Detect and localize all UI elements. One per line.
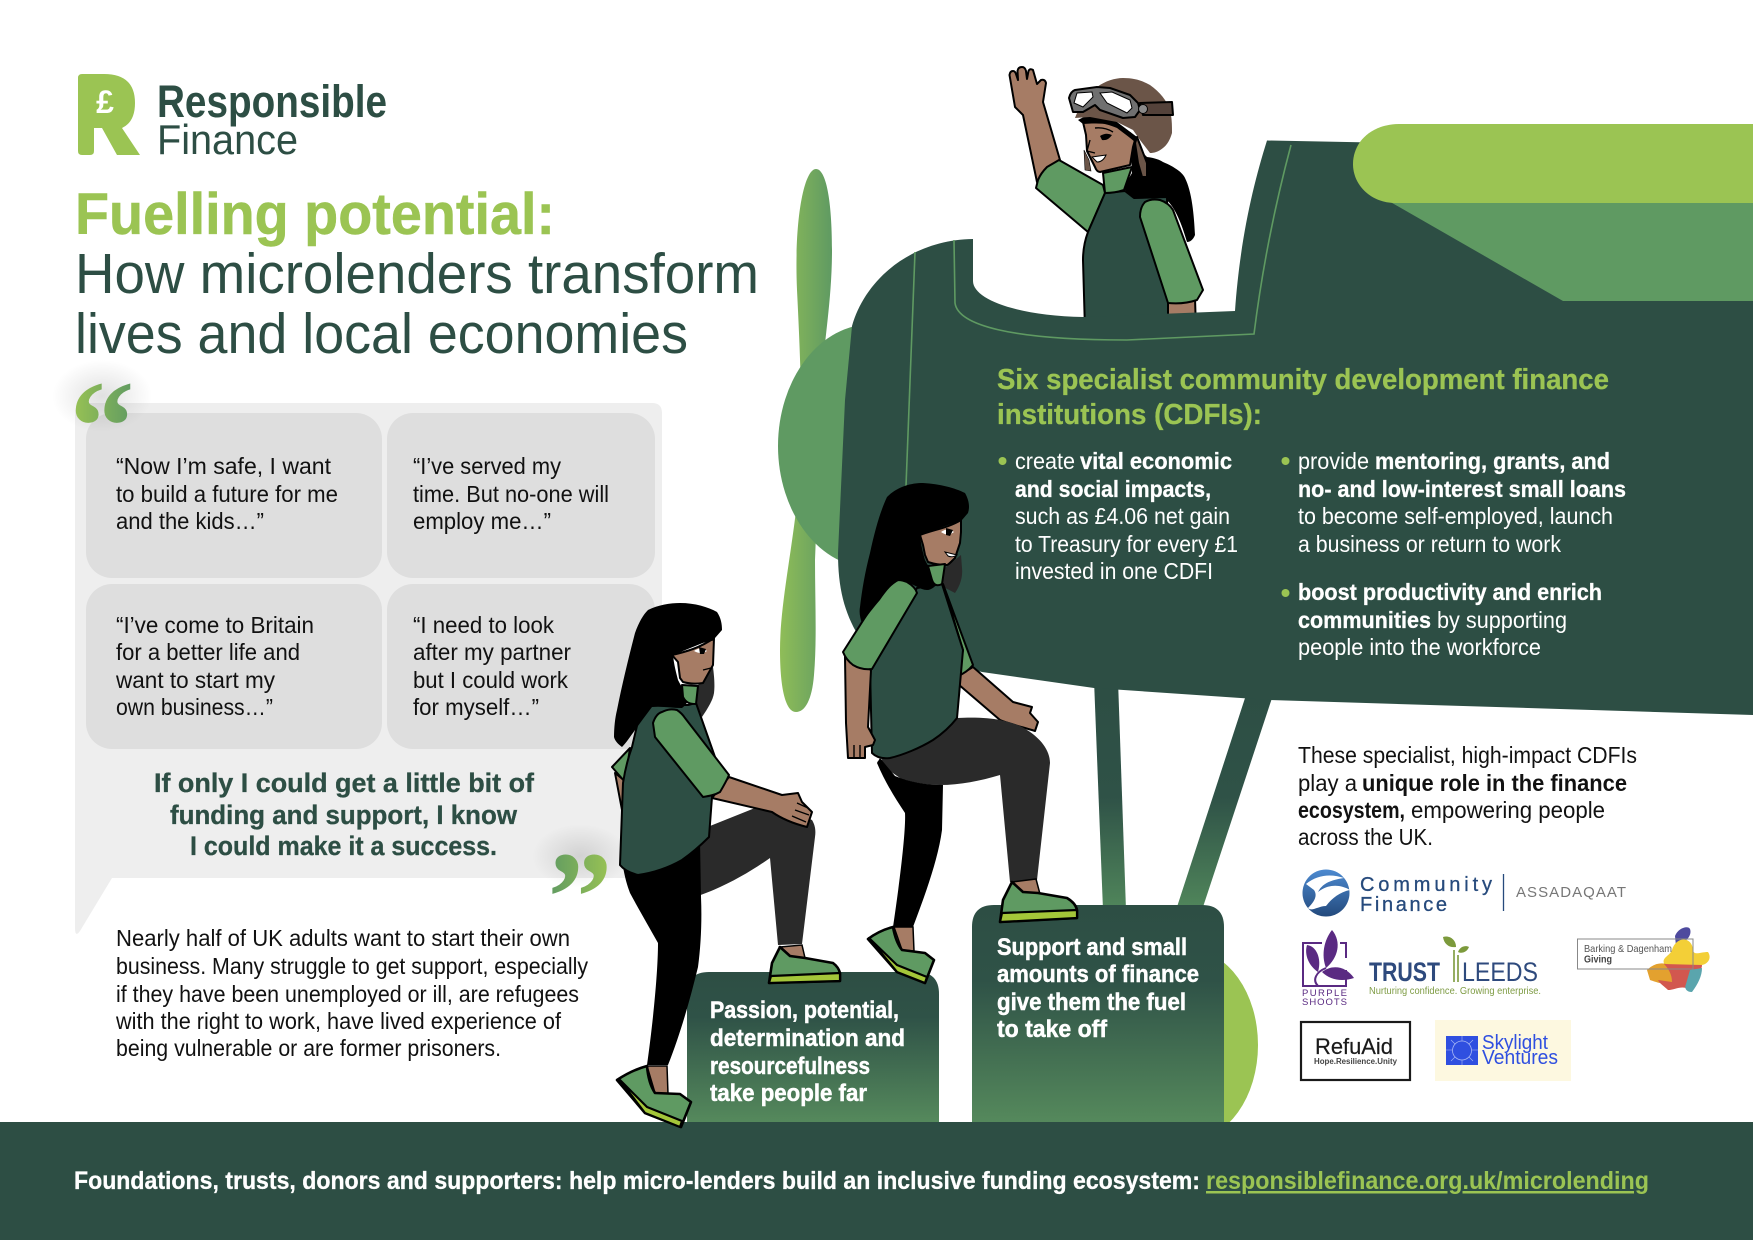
- quote card 3: for a better life and: [116, 639, 300, 665]
- text block: context paragraph: with the right to work, have lived experience of: [115, 1008, 562, 1034]
- text block: context paragraph: [115, 925, 588, 1061]
- step block 1: take people far: [710, 1080, 867, 1107]
- strut 2: [1176, 695, 1273, 910]
- callout: funding wish: funding and support, I know: [170, 800, 518, 830]
- text block: unique role: [1298, 742, 1637, 850]
- bullet: vital economic impacts: invested in one CDFI: [1015, 558, 1213, 584]
- bullet: vital economic impacts: such as £4.06 net gain: [1015, 503, 1230, 529]
- hair: [614, 603, 722, 747]
- logo: Responsible Finance: [78, 74, 387, 163]
- logo: RefuAid: [1301, 1022, 1410, 1080]
- goggles: [1069, 87, 1173, 118]
- face: [920, 520, 961, 565]
- footer banner: [0, 1122, 1753, 1240]
- quote card 3: own business…”: [116, 694, 273, 720]
- arm over knee: [712, 777, 812, 827]
- quote card 4: but I could work: [413, 667, 568, 693]
- text block: context paragraph: Nearly half of UK adults want to start their own: [116, 925, 570, 951]
- logo wordmark: Responsible: [157, 76, 387, 127]
- logo: Barking and Dagenham Giving: Giving: [1584, 954, 1612, 966]
- bullet: mentoring, grants and loans: [1282, 448, 1626, 557]
- logo: RefuAid: Hope.Resilience.Unity: [1314, 1057, 1398, 1066]
- quote card 1: “Now I’m safe, I want: [116, 453, 332, 479]
- raised ankle: [1012, 879, 1040, 894]
- quote card 4: “I need to look: [413, 612, 554, 638]
- logo: Community Finance Assadaqaat: [1302, 870, 1626, 916]
- standing leg: [622, 840, 701, 1065]
- logo: Skylight Ventures: Ventures: [1482, 1047, 1558, 1069]
- logo: Purple Shoots: SHOOTS: [1302, 997, 1347, 1008]
- text block: unique role: across the UK.: [1298, 824, 1433, 850]
- hairline: [1078, 115, 1137, 142]
- torso vest: [620, 703, 715, 875]
- icon: sun square: [1446, 1036, 1478, 1065]
- heading: six specialist CDFIs: [997, 364, 1609, 431]
- bullet: mentoring, grants and loans: a business or return to work: [1298, 531, 1561, 557]
- raised shoe: [1000, 882, 1077, 922]
- raised thigh and lower leg: [695, 808, 815, 945]
- raised arm and hand: [1010, 67, 1060, 182]
- wing: upper lime: [1353, 124, 1753, 203]
- turtleneck: [1103, 167, 1132, 193]
- icon: R with pound sign: £: [96, 84, 114, 120]
- nose cone: [778, 324, 966, 568]
- step block 2: give them the fuel: [997, 989, 1186, 1016]
- pilot back hair: [1123, 140, 1195, 242]
- icon: R with pound sign: [78, 74, 140, 155]
- logo: Trust Leeds: [1369, 937, 1541, 997]
- turtleneck: [928, 564, 945, 585]
- helmet: [1075, 78, 1172, 153]
- title: Fuelling potential:: [75, 182, 555, 247]
- text block: unique role: These specialist, high-impact CDFIs: [1298, 742, 1637, 768]
- bullet: boost productivity: people into the workforce: [1298, 634, 1541, 660]
- pilot facial features: [1087, 128, 1113, 162]
- step block 2: amounts of finance: [997, 961, 1199, 988]
- far arm: [615, 773, 625, 810]
- icon: closing quote mark: [532, 824, 628, 970]
- hair: [860, 483, 969, 623]
- logo: Community Finance Assadaqaat: Finance: [1360, 894, 1447, 916]
- quote card 3: “I’ve come to Britain: [116, 612, 314, 638]
- near sleeve: [843, 580, 917, 669]
- near sleeve: [653, 709, 729, 797]
- logo: Purple Shoots: [1302, 930, 1354, 1008]
- bullet: vital economic impacts: and social impacts,: [1015, 476, 1211, 502]
- bullet: vital economic impacts: [998, 448, 1238, 584]
- title: [75, 182, 759, 366]
- quote card 2: employ me…”: [413, 508, 551, 534]
- logo: Barking and Dagenham Giving: Barking & Dagenham: [1584, 943, 1672, 955]
- logo: Trust Leeds: TRUST: [1369, 957, 1440, 987]
- logo: Community Finance Assadaqaat: Community: [1360, 874, 1492, 896]
- step block 2: [972, 905, 1224, 1124]
- bullet: mentoring, grants and loans: mentoring, grants, and: [1375, 448, 1610, 474]
- icon: closing quote mark: ”: [548, 826, 612, 970]
- illustration: aeroplane: [778, 124, 1753, 1140]
- text block: context paragraph: being vulnerable or are former prisoners.: [116, 1035, 501, 1061]
- bullet: vital economic impacts: to Treasury for every £1: [1015, 531, 1238, 557]
- pilot face: [1083, 122, 1135, 172]
- bullet list: column 1: [998, 448, 1238, 584]
- footer banner: responsiblefinance.org.uk/microlending: [1206, 1167, 1649, 1195]
- step block 1: resourcefulness: [710, 1053, 870, 1080]
- propeller: [780, 169, 832, 712]
- bullet: boost productivity: boost productivity and enrich: [1298, 579, 1602, 605]
- bullet: vital economic impacts: create: [1015, 448, 1075, 474]
- quote card 1: and the kids…”: [116, 508, 264, 534]
- back hair shadow: [690, 667, 714, 717]
- bullet: boost productivity: by supporting: [1437, 607, 1567, 633]
- icon: opening quote mark: “: [70, 355, 134, 499]
- bullet list: column 2: [1282, 448, 1626, 660]
- standing leg: [877, 758, 943, 927]
- text block: unique role: empowering people: [1411, 797, 1605, 823]
- icon: globe: [1302, 870, 1350, 916]
- text block: unique role: ecosystem,: [1298, 797, 1405, 823]
- quote card 4: for myself…”: [413, 694, 539, 720]
- wing: lower mid-green: [1387, 200, 1753, 301]
- quote card 2: [387, 413, 655, 578]
- bullet: mentoring, grants and loans: no- and low-interest small loans: [1298, 476, 1626, 502]
- speech bubble background: [75, 403, 662, 934]
- footer banner: Foundations, trusts, donors and supporters: help micro-lenders build an inclusive funding ecosystem:: [74, 1167, 1200, 1195]
- wheel: [1122, 950, 1258, 1140]
- quote card 1: to build a future for me: [116, 481, 338, 507]
- text block: context paragraph: if they have been unemployed or ill, are refugees: [116, 981, 579, 1007]
- facial features: [940, 520, 960, 557]
- callout: funding wish: [154, 768, 535, 861]
- raised thigh and lower leg: [877, 718, 1050, 882]
- quote card 4: [387, 584, 655, 749]
- icon: opening quote mark: [52, 355, 152, 499]
- face: [672, 638, 714, 684]
- raised shoe: [769, 947, 840, 983]
- logo: Community Finance Assadaqaat: ASSADAQAAT: [1516, 884, 1626, 901]
- callout: funding wish: If only I could get a little bit of: [154, 768, 535, 798]
- turtleneck: [682, 685, 698, 704]
- bullet: mentoring, grants and loans: to become self-employed, launch: [1298, 503, 1613, 529]
- helmet ear flap: [1135, 137, 1147, 177]
- step block 2: Support and small: [997, 934, 1187, 961]
- logo: RefuAid: RefuAid: [1315, 1034, 1393, 1059]
- fuselage: [838, 140, 1753, 715]
- far arm and sleeve: [1140, 199, 1203, 330]
- quote card 2: “I’ve served my: [413, 453, 561, 479]
- logo: Purple Shoots: PURPLE: [1302, 988, 1347, 999]
- strut 1: [1094, 680, 1126, 910]
- icon: sprout: [1443, 937, 1469, 982]
- logo wordmark: [157, 76, 387, 163]
- far arm: [958, 667, 1038, 731]
- quote card 4: after my partner: [413, 639, 571, 665]
- torso vest: [870, 584, 963, 758]
- step block 1: [687, 972, 939, 1124]
- back hair shadow: [930, 555, 962, 593]
- logo: Skylight Ventures: Skylight: [1482, 1032, 1548, 1054]
- logo: Trust Leeds: Nurturing confidence. Growing enterprise.: [1369, 985, 1541, 997]
- waving sleeve: [1036, 160, 1105, 232]
- logo wordmark: Finance: [157, 116, 298, 163]
- logo: Barking and Dagenham Giving: [1578, 927, 1710, 992]
- heading: six specialist CDFIs: institutions (CDFIs):: [997, 399, 1262, 431]
- text block: context paragraph: business. Many struggle to get support, especially: [116, 953, 588, 979]
- lower shoe: [617, 1066, 691, 1127]
- quote card 3: want to start my: [115, 667, 275, 693]
- figure: woman on higher step: [843, 483, 1077, 983]
- step block 2: to take off: [997, 1016, 1108, 1043]
- fuselage panel lines: [906, 145, 1291, 486]
- bullet: mentoring, grants and loans: provide: [1298, 448, 1369, 474]
- facial features: [694, 640, 713, 670]
- figure: pilot waving in cockpit: [1010, 67, 1203, 330]
- icon: colourful map blob: [1578, 927, 1710, 992]
- figure: woman on lower step: [612, 603, 840, 1127]
- step block 1: Passion, potential,: [710, 997, 899, 1024]
- quote card 1: [86, 413, 382, 578]
- lower shoe: [868, 927, 934, 983]
- bullet: boost productivity: communities: [1298, 607, 1431, 633]
- heading: six specialist CDFIs: Six specialist community development finance: [997, 364, 1609, 396]
- left ear flap: [1084, 150, 1091, 171]
- bullet: boost productivity: [1282, 579, 1602, 660]
- icon: purple leaves: [1303, 930, 1354, 986]
- text block: unique role: play a: [1298, 770, 1357, 796]
- logo: Trust Leeds: LEEDS: [1462, 957, 1538, 987]
- logo: Skylight Ventures: [1435, 1020, 1571, 1081]
- panel: speech bubble of quotes: [52, 355, 662, 970]
- quote card 3: [86, 584, 382, 749]
- quote card 2: time. But no-one will: [413, 481, 609, 507]
- pilot vest: [1083, 191, 1169, 330]
- hanging arm and hand: [845, 657, 875, 758]
- bullet: vital economic impacts: vital economic: [1080, 448, 1232, 474]
- title: How microlenders transform: [75, 242, 759, 306]
- far sleeve: [943, 584, 973, 676]
- text block: unique role: unique role in the finance: [1362, 770, 1627, 796]
- callout: funding wish: I could make it a success.: [190, 831, 497, 861]
- far sleeve: [612, 748, 630, 782]
- lower ankle: [894, 927, 914, 951]
- raised ankle: [780, 945, 805, 958]
- title: lives and local economies: [75, 302, 688, 366]
- lower ankle: [647, 1066, 668, 1094]
- step block 1: determination and: [710, 1025, 905, 1052]
